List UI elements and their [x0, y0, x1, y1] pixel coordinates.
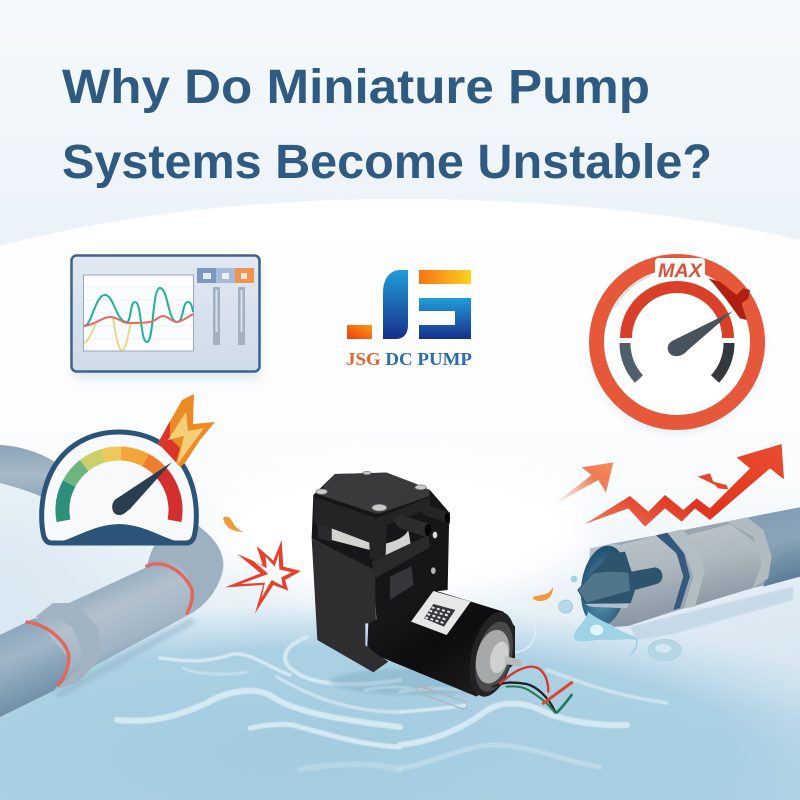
title [62, 61, 712, 189]
retaining band [372, 535, 430, 578]
broken notch [577, 552, 662, 603]
right gauge MAX [593, 258, 761, 431]
QR label [411, 591, 471, 635]
navy ring [656, 533, 690, 610]
orange spark left [223, 517, 243, 532]
water wave lines [117, 637, 667, 770]
bolts [316, 471, 426, 511]
lower-left pipe section [0, 618, 70, 717]
head block [313, 497, 430, 561]
pipe ground shadow [630, 587, 793, 640]
bracket openings [390, 566, 413, 600]
rear bracket silhouette [312, 473, 450, 623]
red arc scale [626, 287, 728, 338]
miniature pump [312, 471, 572, 713]
lid [315, 473, 430, 513]
steel collar [667, 529, 705, 609]
shaft [505, 656, 522, 667]
limit knob [708, 278, 750, 320]
base hump [50, 524, 188, 544]
pipe shadow [55, 618, 197, 698]
grey scale ends [625, 343, 639, 379]
left gauge [42, 432, 196, 544]
upper pipe segment behind gauge [0, 445, 60, 505]
pipe backing [610, 507, 800, 626]
nozzles [393, 504, 450, 536]
line chart [84, 275, 194, 351]
right pipe [576, 507, 800, 640]
lightning bolt [158, 394, 215, 467]
monitor panel [72, 256, 260, 378]
rising zigzag arrow [585, 444, 784, 527]
logo [346, 270, 472, 369]
wires [493, 667, 572, 713]
motor cylinder [367, 590, 515, 697]
left pillar [317, 519, 332, 542]
blue pipe section [748, 507, 800, 587]
gauge needle [112, 462, 172, 515]
needle [668, 311, 733, 356]
starburst [225, 540, 301, 613]
front tube [587, 534, 687, 627]
pump body [312, 538, 388, 672]
faded orange arrow [553, 462, 613, 505]
pipe collar [35, 603, 102, 690]
water splash [559, 576, 681, 661]
title: Why Do Miniature Pump [62, 61, 650, 114]
elbow shading [150, 527, 223, 613]
red bands [27, 564, 192, 685]
ripple near motor [495, 612, 535, 652]
motor end face [462, 607, 523, 701]
left pipe [0, 445, 223, 717]
colour arc [62, 453, 176, 521]
logo: JSG DC PUMP [346, 349, 472, 369]
pump shadow [330, 668, 510, 695]
MAX tab: MAX [658, 261, 703, 282]
steel flange [727, 517, 772, 588]
sliders [213, 287, 245, 345]
paperclip [417, 686, 467, 709]
pipe mouth [576, 543, 632, 629]
elbow and lower pipe [0, 525, 223, 717]
title: Systems Become Unstable? [62, 136, 712, 189]
white diaphragm [332, 528, 412, 557]
control buttons [197, 268, 254, 283]
steel sleeve [680, 524, 762, 607]
water body [0, 590, 800, 800]
orange spark right [533, 587, 553, 601]
